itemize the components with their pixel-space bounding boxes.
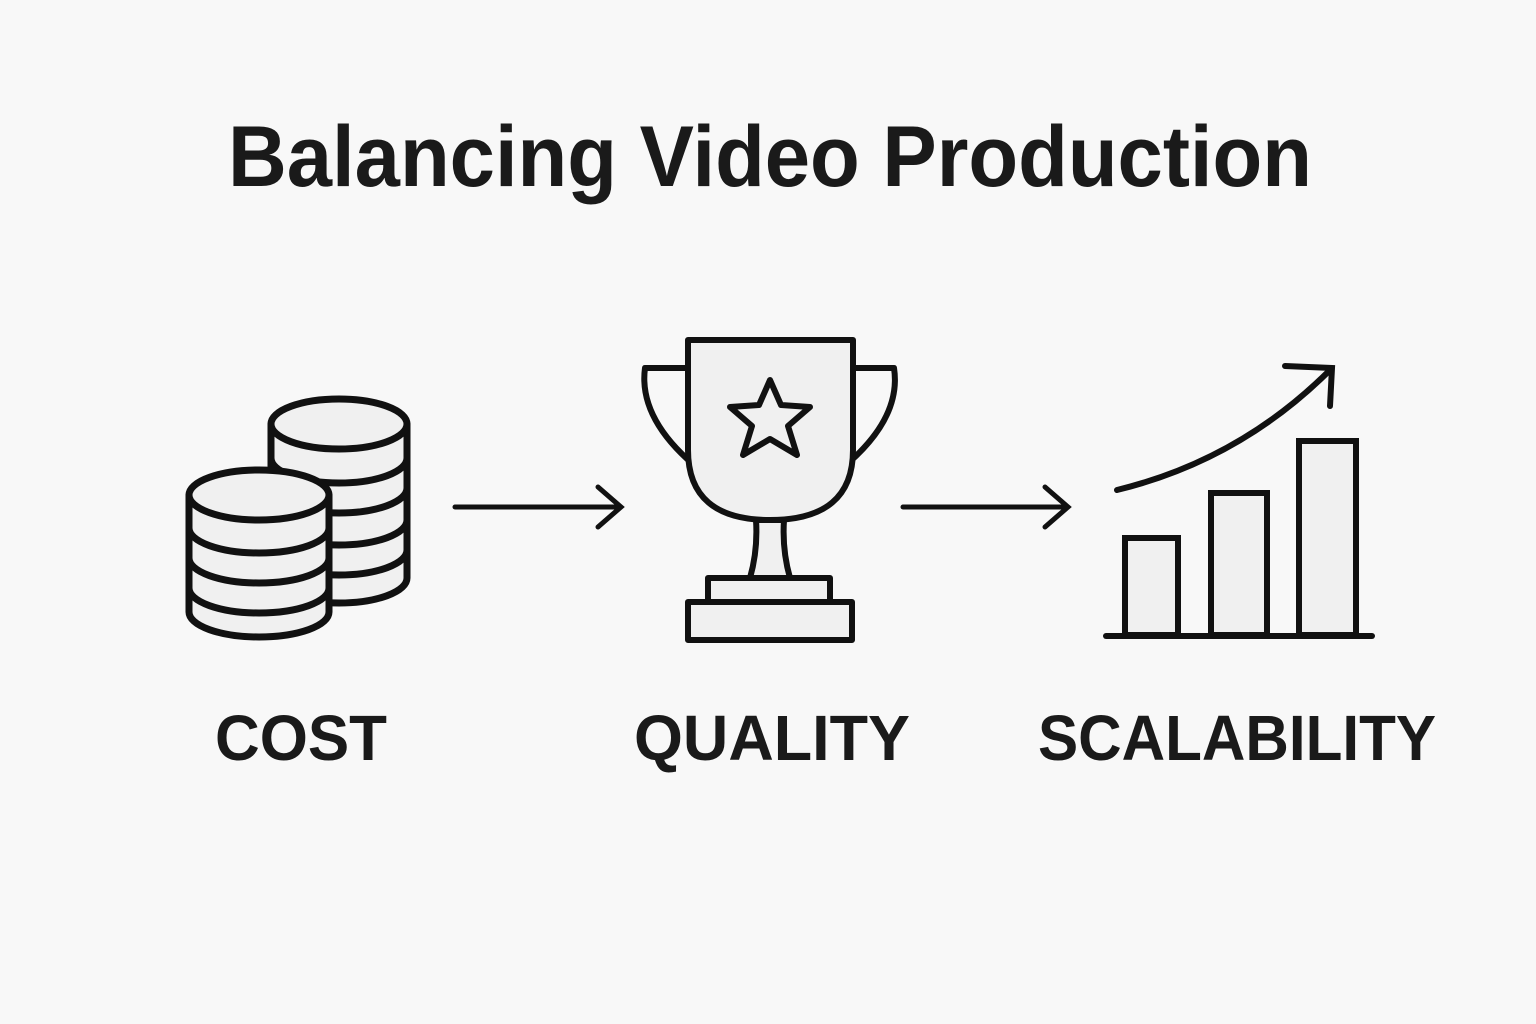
arrow 2: [903, 487, 1068, 527]
label: scalability: SCALABILITY: [1038, 702, 1436, 774]
title: Balancing Video Production: [228, 109, 1312, 205]
icon: trophy: [644, 340, 895, 640]
arrow 1: [455, 487, 621, 527]
label: quality: QUALITY: [634, 702, 910, 774]
icon: coins: [189, 399, 407, 637]
label: cost: COST: [215, 702, 387, 774]
icon: bar chart: [1106, 366, 1372, 636]
